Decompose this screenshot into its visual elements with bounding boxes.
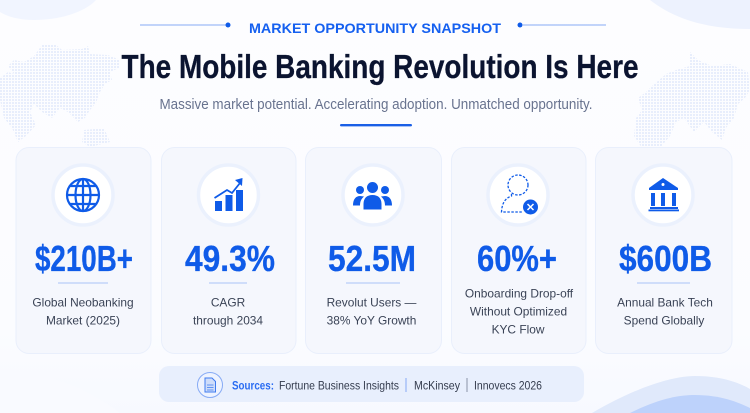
sources bar: [159, 366, 584, 402]
panel: Revolut users: [306, 148, 442, 354]
icon: document: [198, 372, 222, 398]
stat: 52.5M: [328, 238, 416, 279]
icon: bank: [648, 178, 679, 211]
icon: dashed user with x badge: [502, 175, 538, 214]
icon: globe: [67, 179, 99, 211]
label: Onboarding Drop-off: [465, 286, 574, 300]
panel: bank tech spend: [596, 148, 732, 354]
label: Market (2025): [46, 314, 120, 328]
label: CAGR: [211, 296, 246, 310]
stat: $210B+: [35, 238, 133, 279]
stat: 49.3%: [185, 238, 275, 279]
icon: users: [353, 182, 392, 210]
sources bar: McKinsey: [414, 378, 460, 392]
label: Annual Bank Tech: [617, 296, 713, 310]
label: Global Neobanking: [32, 296, 134, 310]
label: Spend Globally: [624, 314, 704, 328]
world map right: [634, 52, 750, 148]
label: through 2034: [193, 314, 263, 328]
eyebrow heading: [140, 20, 606, 36]
title underline: [340, 124, 412, 126]
panel: CAGR: [162, 148, 296, 354]
panel: global neobanking market: [16, 148, 151, 354]
label: Revolut Users —: [327, 296, 417, 310]
panel: onboarding drop-off: [452, 148, 586, 354]
world map left: [0, 44, 120, 147]
sources bar: Fortune Business Insights: [279, 378, 399, 392]
source text: Sources:: [232, 378, 274, 392]
eyebrow heading: MARKET OPPORTUNITY SNAPSHOT: [249, 20, 501, 36]
icon: growth chart: [214, 178, 243, 211]
stat: $600B: [619, 238, 712, 279]
label: KYC Flow: [492, 322, 545, 336]
stat: 60%+: [477, 238, 557, 279]
title: The Mobile Banking Revolution Is Here: [122, 48, 638, 85]
label: Without Optimized: [470, 304, 567, 318]
subtitle: Massive market potential. Accelerating adoption. Unmatched opportunity.: [160, 97, 592, 113]
sources bar: Innovecs 2026: [474, 378, 542, 392]
label: 38% YoY Growth: [327, 314, 416, 328]
